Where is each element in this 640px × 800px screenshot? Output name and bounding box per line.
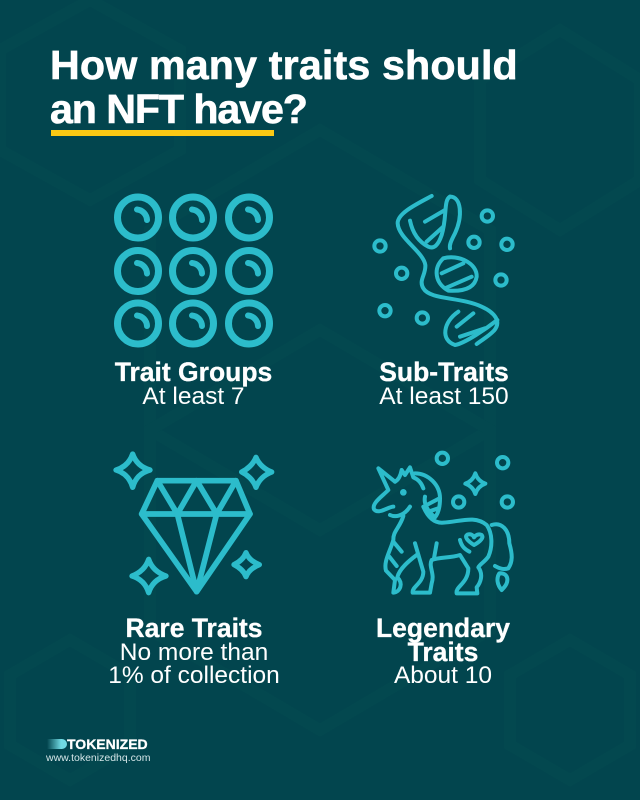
label: trait groups: Trait Groups [115, 357, 272, 387]
label: trait groups: At least 7 [142, 382, 245, 410]
label: rare traits [108, 613, 280, 689]
label: legendary traits [376, 613, 510, 689]
label: rare traits: 1% of collection [108, 662, 280, 689]
label: legendary traits: Legendary [376, 613, 510, 643]
label: legendary traits: Traits [408, 636, 478, 666]
logo: Tokenized [48, 736, 148, 752]
label: rare traits: No more than [120, 638, 268, 666]
title underline [51, 130, 274, 136]
label: rare traits: Rare Traits [126, 613, 262, 643]
logo wordmark: TOKENIZED [67, 736, 148, 752]
title: How many traits should [50, 42, 518, 88]
icon: DNA helix [372, 194, 515, 347]
label: sub-traits [379, 357, 509, 410]
title [50, 42, 518, 132]
title: an NFT have? [50, 86, 307, 132]
label: trait groups [114, 357, 272, 410]
label: sub-traits: At least 150 [379, 382, 509, 410]
icon: trait group circles [114, 194, 273, 348]
icon: diamond with sparkles [113, 451, 274, 596]
label: sub-traits: Sub-Traits [379, 357, 509, 387]
logo mark [47, 739, 67, 749]
icon: unicorn with sparkles [372, 450, 515, 596]
label: legendary traits: About 10 [394, 662, 492, 689]
website url: www.tokenizedhq.com [46, 752, 150, 764]
